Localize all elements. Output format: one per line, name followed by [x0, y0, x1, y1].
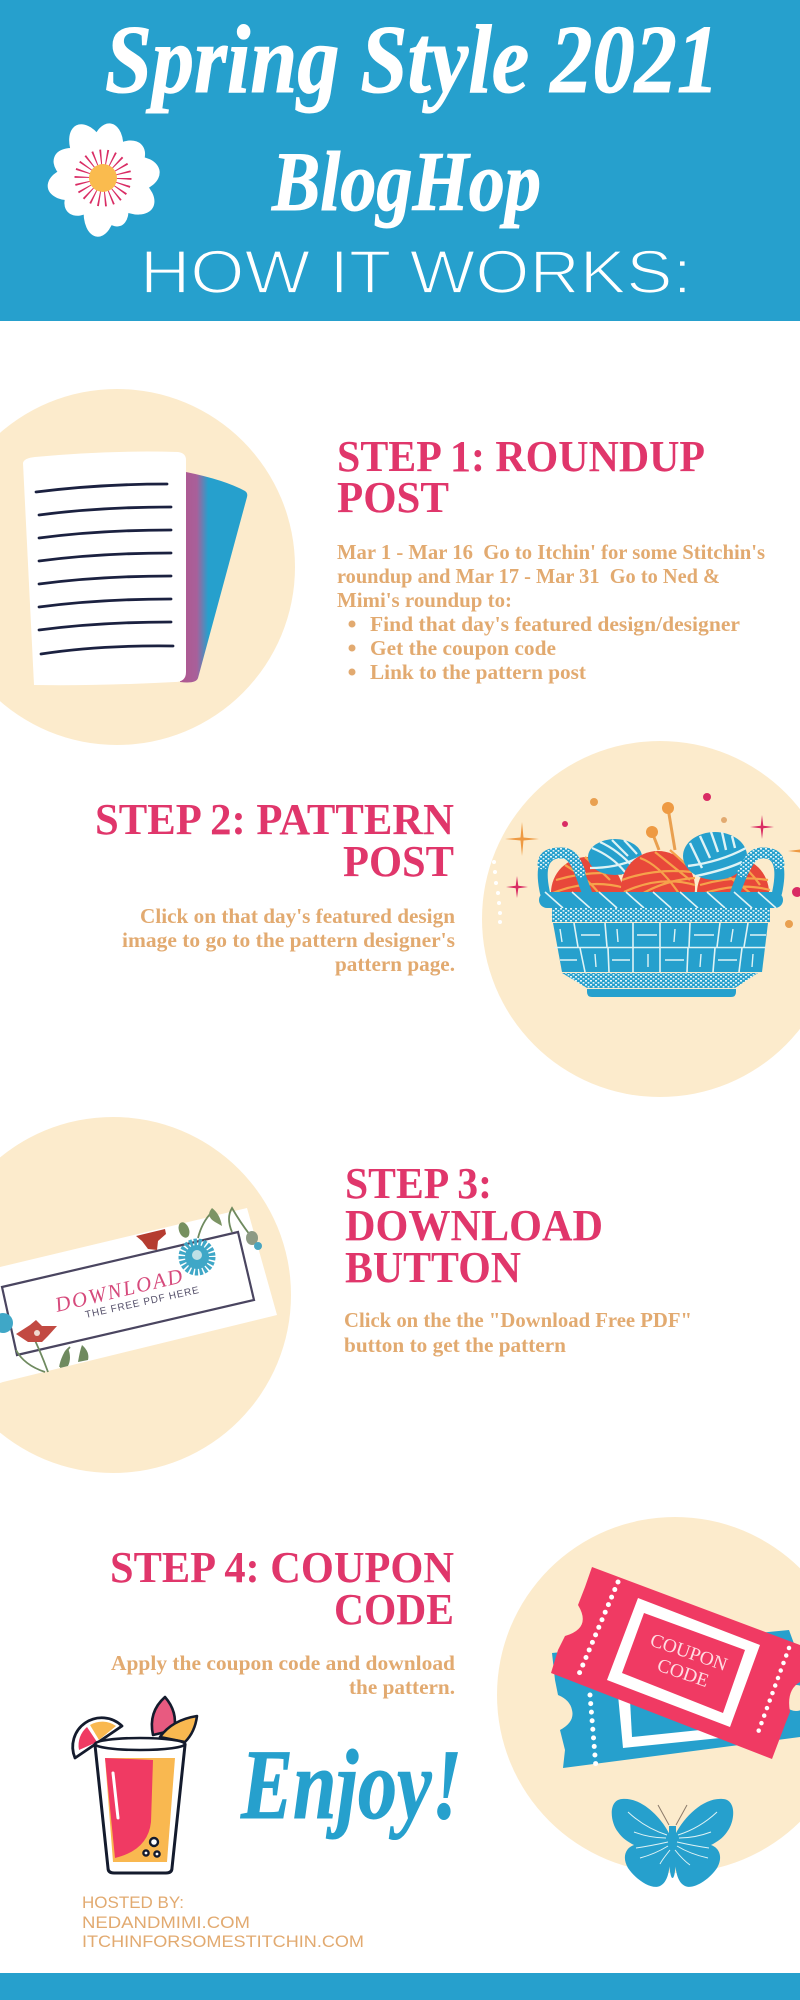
step 2 heading: POST	[343, 837, 454, 886]
code text: CODE	[654, 1655, 711, 1692]
step 2 body text: Click on that day's featured design	[140, 904, 455, 928]
icon: download banner	[0, 1208, 277, 1383]
step 2 heading	[95, 795, 454, 886]
heading: how it works: HOW IT WORKS:	[140, 238, 692, 306]
icon: blue ticket	[552, 1630, 800, 1768]
step 1 body text: roundup and Mar 17 - Mar 31 Go to Ned &	[337, 564, 720, 588]
footer bar	[0, 1973, 800, 2000]
header banner	[0, 0, 800, 321]
highlight	[113, 1773, 118, 1818]
step 3 heading: BUTTON	[345, 1243, 521, 1292]
step 1 heading: POST	[337, 473, 449, 522]
step 4 cream circle	[497, 1517, 800, 1873]
subtitle: BlogHop: BlogHop	[271, 135, 541, 229]
icon: daisy flower	[45, 118, 162, 238]
basket base	[587, 989, 736, 997]
step 3 heading	[345, 1159, 603, 1292]
step 4 heading: CODE	[334, 1585, 454, 1634]
step 4 body text: the pattern.	[349, 1675, 455, 1699]
glass body	[95, 1745, 185, 1873]
yarn balls	[551, 832, 770, 892]
banner text: download: DOWNLOAD	[52, 1264, 185, 1317]
hosted by credits	[82, 1893, 364, 1951]
step 2 body text: pattern page.	[335, 952, 455, 976]
sparkles and dots	[492, 793, 800, 928]
step 3 heading: STEP 3:	[345, 1159, 492, 1208]
panel: step 2 pattern post	[95, 741, 800, 1097]
enjoy script: Enjoy!	[240, 1729, 462, 1840]
icon: drink glass	[73, 1697, 197, 1873]
step 2 heading: STEP 2: PATTERN	[95, 795, 454, 844]
coupon text: COUPON	[647, 1630, 730, 1676]
hosted by credits: ITCHINFORSOMESTITCHIN.COM	[82, 1932, 364, 1951]
step 3 body text: Click on the the "Download Free PDF"	[344, 1308, 692, 1332]
step 1 body text: Find that day's featured design/designer	[370, 612, 740, 636]
hosted by credits: NEDANDMIMI.COM	[82, 1913, 250, 1932]
bubbles	[143, 1838, 160, 1857]
basket rim	[539, 892, 783, 908]
step 1 body text: Get the coupon code	[370, 636, 556, 660]
step 4 heading: STEP 4: COUPON	[110, 1543, 454, 1592]
basket handles	[543, 853, 779, 893]
step 1 cream circle	[0, 389, 295, 745]
basket woven body	[553, 923, 768, 972]
step 1 body text: Link to the pattern post	[370, 660, 586, 684]
step 1 heading: STEP 1: ROUNDUP	[337, 432, 705, 481]
step 4 heading	[110, 1543, 454, 1634]
step 1 body text	[337, 540, 765, 684]
step 3 body text	[344, 1308, 692, 1357]
knitting needles	[646, 802, 675, 850]
step 3 body text: button to get the pattern	[344, 1333, 566, 1357]
step 4 body text: Apply the coupon code and download	[111, 1651, 455, 1675]
banner text: the free pdf here: THE FREE PDF HERE	[84, 1285, 200, 1321]
title: Spring Style 2021: Spring Style 2021	[105, 6, 719, 114]
step 4 body text	[111, 1651, 455, 1699]
leaves	[152, 1697, 197, 1742]
icon: butterfly	[612, 1799, 733, 1887]
icon: document pages	[23, 452, 247, 685]
icon: pink coupon ticket	[551, 1567, 800, 1759]
step 1 body text: Mar 1 - Mar 16 Go to Itchin' for some Stitchin's	[337, 540, 765, 564]
citrus slice	[73, 1718, 122, 1758]
step 2 body text: image to go to the pattern designer's	[122, 928, 455, 952]
hosted by credits: HOSTED BY:	[82, 1893, 184, 1912]
icon: yarn basket	[492, 793, 800, 997]
step 2 cream circle	[482, 741, 800, 1097]
step 3 heading: DOWNLOAD	[345, 1201, 603, 1250]
basket speckled bands	[552, 908, 770, 988]
banner floral decoration	[0, 1208, 262, 1372]
glass rim	[95, 1738, 185, 1750]
step 2 body text	[122, 904, 455, 976]
panel: step 3 download button	[0, 1117, 692, 1473]
orange liquid	[105, 1758, 175, 1862]
pink liquid	[105, 1758, 153, 1858]
step 1 heading	[337, 432, 705, 522]
step 3 cream circle	[0, 1117, 291, 1473]
panel: step 1 roundup post	[0, 389, 765, 745]
panel: step 4 coupon code	[73, 1517, 800, 1951]
step 1 body text: Mimi's roundup to:	[337, 588, 512, 612]
